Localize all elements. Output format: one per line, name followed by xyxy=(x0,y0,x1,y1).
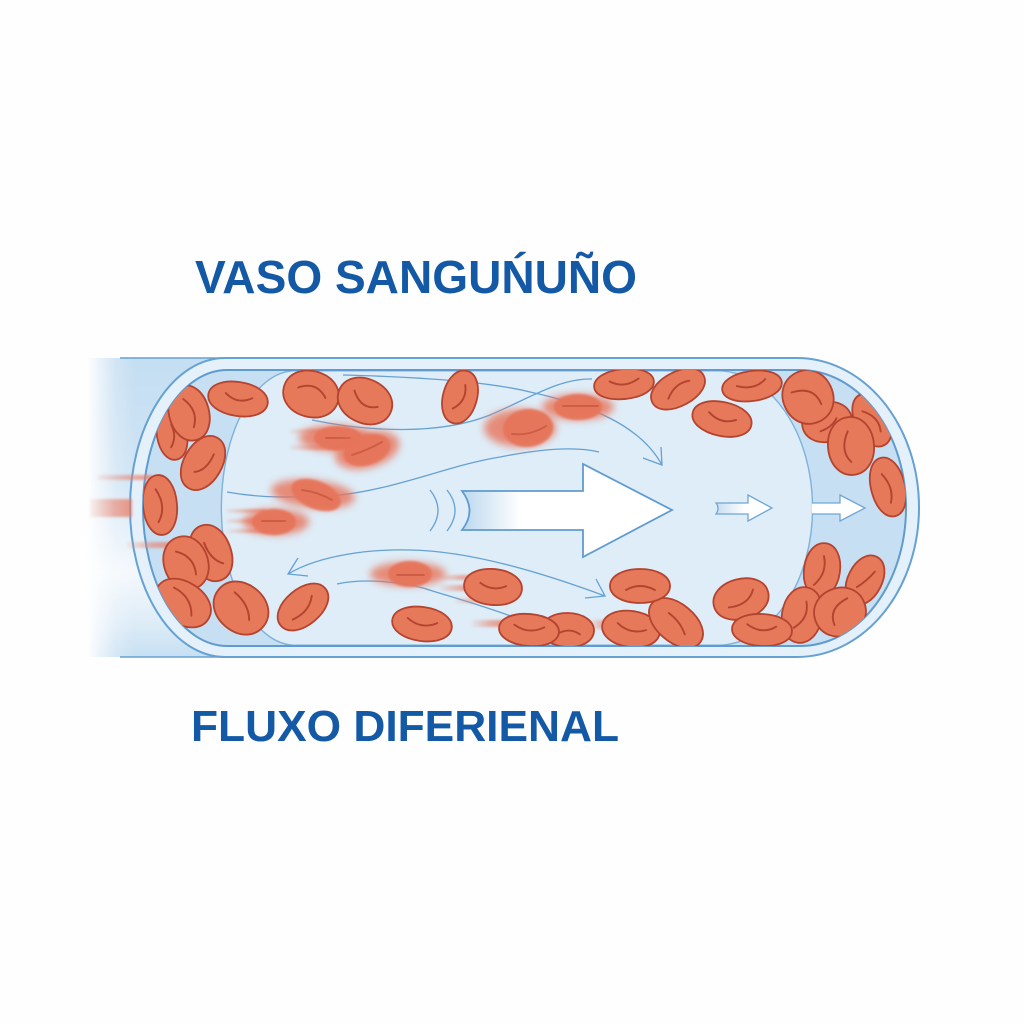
lumen bottom and top edge xyxy=(227,370,800,646)
flow line: upper curve xyxy=(312,379,592,430)
cell group: right wall xyxy=(780,370,906,644)
flow line: middle curve xyxy=(227,449,599,497)
motion arcs xyxy=(430,490,455,531)
cell group: left wall xyxy=(140,378,337,645)
flow line: lower curve xyxy=(337,581,513,617)
red blood cells xyxy=(140,360,912,657)
vessel central lumen xyxy=(221,371,813,645)
title: vaso sanguíneo: VASO SANGUŃUÑO xyxy=(195,251,637,303)
cell group: bottom wall xyxy=(391,568,793,646)
label: fluxo diferencial: FLUXO DIFERIENAL xyxy=(191,702,619,751)
blood vessel diagram xyxy=(80,358,919,657)
large central flow arrow xyxy=(462,464,672,557)
vessel open end fade xyxy=(80,358,236,657)
flow arrow: lower, both ways xyxy=(288,550,605,598)
flow line: upper right arrow xyxy=(343,375,662,465)
blurred fast cells xyxy=(226,394,614,587)
inflow streaks xyxy=(90,475,614,629)
vessel outer wall xyxy=(130,358,919,657)
small arrow: medium flow xyxy=(716,495,772,521)
cell group: top wall xyxy=(282,370,783,438)
vessel plasma layer xyxy=(143,370,906,646)
small arrow: slow flow xyxy=(812,495,865,521)
